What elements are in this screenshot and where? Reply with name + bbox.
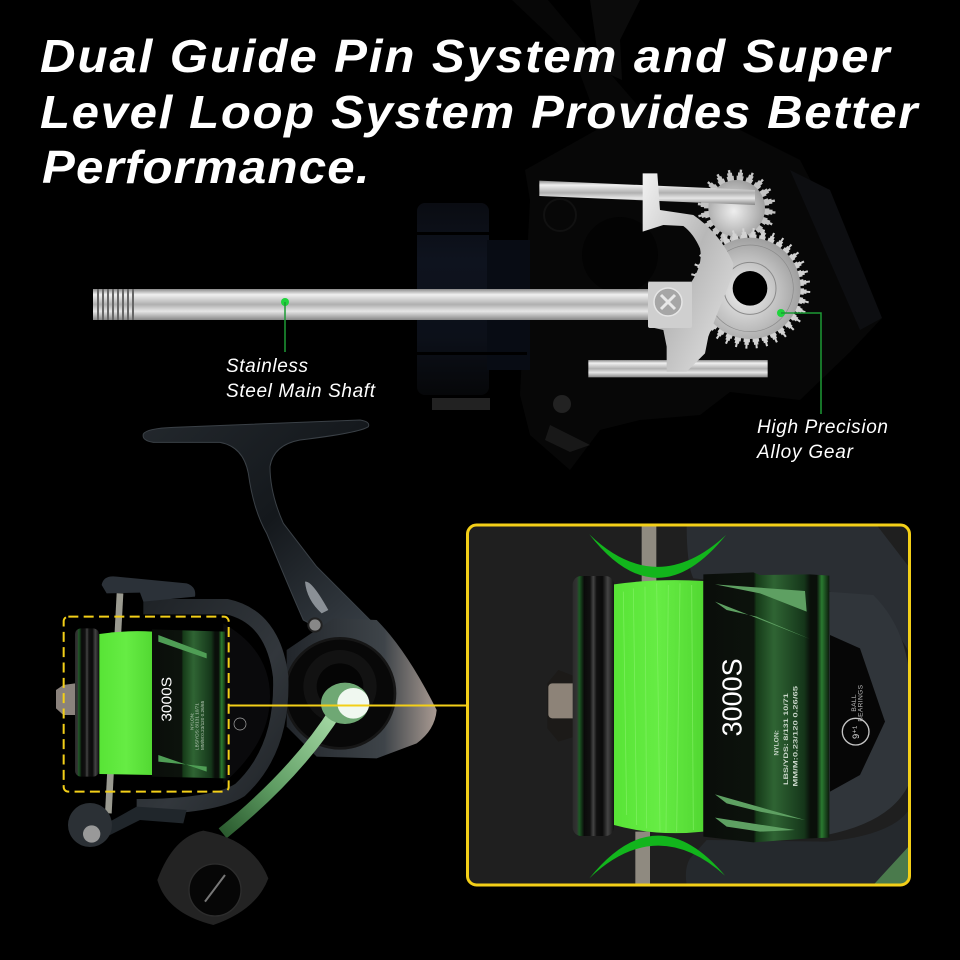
spec text: MM/M:0.23/120 0.26/65 [792,686,799,787]
spool spec text: NYLON: [189,713,194,730]
callout: alloy gear [756,309,888,463]
spool line close-up [614,580,703,833]
rotor arm top close-up [687,525,910,655]
spool spec text: LBS/YDS: 8/131 10/71 [195,703,200,750]
spool flange close-up [573,576,614,836]
handle corner [874,847,908,884]
rotor circle [285,638,395,748]
callout: alloy gear: Alloy Gear [756,442,854,463]
main stainless shaft [93,289,650,320]
title: Dual Guide Pin System and Super [40,31,892,83]
ball bearing badge [842,684,869,745]
bail wire segments [643,525,649,885]
bearing badge [234,718,246,730]
spool nut close-up [547,670,580,742]
bail lower knob [68,803,187,847]
spool spec text: MM/M:0.23/120 0.26/65 [200,700,205,750]
stem screw [308,618,322,632]
reel foot and stem [143,420,380,637]
spool fins [715,584,810,832]
lower guide rod [588,360,768,377]
spec text: NYLON: [774,730,781,756]
spool body close-up [703,572,829,842]
panel: spool close-up [468,525,910,885]
green fishing line [99,631,153,775]
spool nut [56,683,75,715]
ball bearing badge: BALL [851,694,858,712]
spool body [152,629,226,778]
top reel dark silhouette [512,0,882,470]
3000S text: 3000S [717,658,748,736]
callout: alloy gear: High Precision [757,417,888,438]
spool model text: 3000S [159,677,175,722]
spec text: LBS/YDS: 8/131 10/71 [783,693,790,785]
bail top arm [102,576,195,602]
upper guide rod [539,181,755,205]
rotor arm [137,607,281,807]
callout: main shaft: Steel Main Shaft [226,381,376,402]
handle hub highlight [321,683,369,724]
lower green crescent [589,836,725,878]
callout: main shaft [226,298,376,402]
stem slot [305,582,328,613]
title [40,31,920,194]
rotor inner close-up [827,592,910,835]
bail wire [108,593,120,813]
spool flange [75,628,99,777]
ball bearing badge: BEARINGS [858,684,865,722]
small gear [699,171,774,246]
upper green crescent [589,534,726,578]
shaft screw block [648,282,692,328]
handle knob [157,831,268,925]
callout: main shaft: Stainless [226,356,308,377]
rotor arm bottom close-up [686,808,910,885]
ball bearing badge: 9⁺¹ [851,726,861,739]
yellow connector line [228,704,466,706]
spool support block [417,203,590,452]
level loop arch bracket [643,173,733,372]
rotor black cavity [830,635,885,792]
handle arm [223,710,337,833]
inner rotor [223,623,270,783]
title: Performance. [42,142,369,194]
title: Level Loop System Provides Better [40,87,920,139]
spinning reel [56,420,437,925]
yellow dashed highlight [64,617,229,792]
large alloy gear [692,230,808,347]
spool green fins [158,635,207,772]
gear body cover [287,618,437,758]
gear mechanism [539,171,808,377]
